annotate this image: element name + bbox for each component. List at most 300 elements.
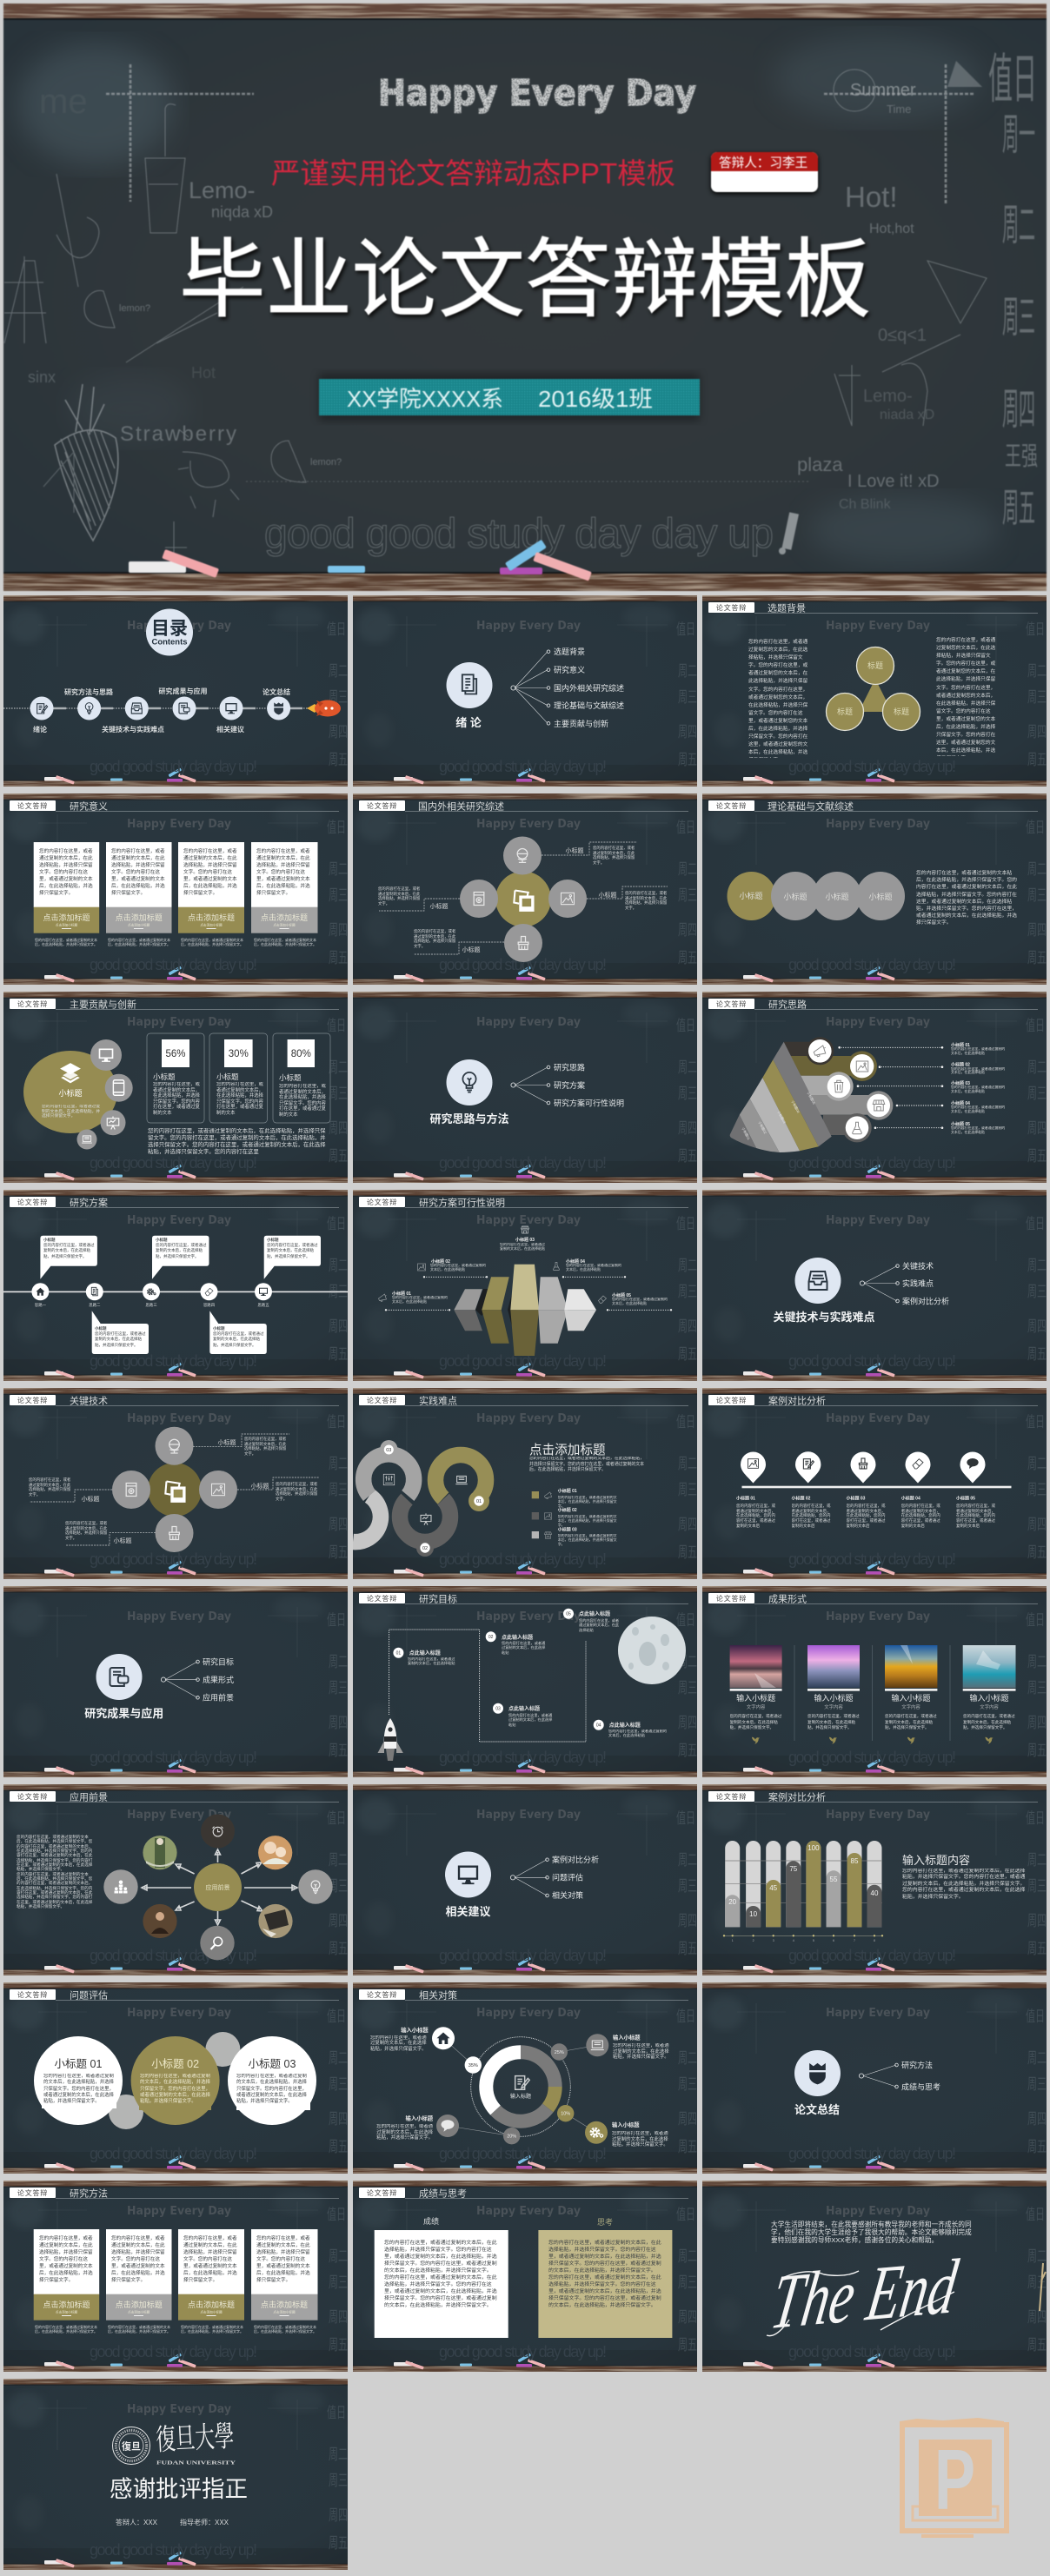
text right: 您的内容打在这里，或者通过复制的文本后，在此选择粘贴，并选择只保留文字。 bbox=[625, 891, 667, 909]
item labels: 小标题 01 bbox=[951, 1042, 970, 1048]
section items: 研究思路 bbox=[554, 1062, 585, 1072]
legend labels: 小标题 02 bbox=[558, 1507, 577, 1513]
column labels: 小标题 03 bbox=[847, 1495, 866, 1502]
item labels: 小标题 03 bbox=[515, 1237, 535, 1243]
slide: 目录: 周三 bbox=[329, 689, 348, 707]
flower diagram bbox=[112, 1427, 237, 1552]
slide: 论文总结 section: 周三 bbox=[1027, 2076, 1047, 2094]
slide: 研究方法: 值日 bbox=[327, 2206, 346, 2224]
heading bbox=[10, 998, 339, 1010]
branch lines bbox=[511, 1066, 550, 1105]
heading: 选题背景 bbox=[768, 601, 806, 614]
axis: 7 bbox=[854, 1939, 855, 1942]
card text 2: 您的内容打在这里，或者通过复制的文本后，在此选择粘贴，并选择只保留文字。您的内容打在这里，或者通过复制的文本后，在此选择粘贴，并选择只保留文字。 bbox=[111, 2236, 165, 2283]
slide: The End: 周五 bbox=[1027, 2337, 1047, 2354]
outer icon circles bbox=[103, 1815, 333, 1960]
number circles bbox=[393, 1609, 604, 1730]
slide: 国内外相关研究综述: 周四 bbox=[678, 922, 697, 939]
card captions: 点击添加小标题 bbox=[200, 923, 223, 926]
section items: 关键技术 bbox=[902, 1261, 934, 1271]
section icon bbox=[794, 1258, 841, 1304]
slide: 实践难点: 周四 bbox=[678, 1517, 697, 1534]
chalk writing right: niada xD bbox=[880, 408, 934, 422]
text 2: 您的内容打在这里，或者通过复制的文本后，在此选择粘贴，并选择只保留文字。 bbox=[807, 1714, 860, 1730]
card panels bbox=[34, 2229, 317, 2320]
ribbon end markers: 02 bbox=[422, 1546, 428, 1551]
cone diagram: 小标题03 bbox=[776, 1110, 787, 1124]
item titles: 点此输入标题 bbox=[579, 1610, 610, 1617]
column labels bbox=[736, 1495, 975, 1502]
picture captions: 文字内容 bbox=[747, 1703, 766, 1710]
card captions: 点击添加标题 bbox=[188, 913, 235, 922]
closing script: The End bbox=[766, 2243, 963, 2346]
legend labels: 小标题 01 bbox=[558, 1488, 577, 1494]
heading bbox=[708, 1790, 1038, 1803]
presenter badge: 答辩人：习李王 bbox=[719, 156, 807, 170]
slide: 案例对比分析 bar chart bbox=[702, 1784, 1047, 1975]
slide: 研究方法: Happy Every Day bbox=[127, 2205, 232, 2218]
slide: The End bbox=[702, 2181, 1047, 2372]
white circle 01 bbox=[34, 2036, 123, 2125]
center circle: 应用前景 bbox=[205, 1883, 229, 1891]
heading: 案例对比分析 bbox=[768, 1790, 826, 1803]
slide: 案例对比分析 bar chart: 周三 bbox=[1027, 1878, 1047, 1895]
heading: 论文答辩 bbox=[17, 1792, 48, 1801]
timeline labels bbox=[33, 687, 290, 734]
slide: 问题评估: 周三 bbox=[329, 2076, 348, 2094]
three circle diagram: 标题 bbox=[867, 661, 883, 670]
slide: 研究目标 bbox=[353, 1586, 697, 1777]
donut center: 输入标题 bbox=[510, 2093, 531, 2100]
slide: 绪论 section bbox=[353, 595, 697, 787]
slide: 案例对比分析 bar chart: 周五 bbox=[1027, 1941, 1047, 1958]
department ribbon: XX学院XXXX系 bbox=[347, 386, 503, 412]
slide: 问题评估 bbox=[3, 1982, 348, 2174]
item text 02: 您的内容打在这里，或者通过复制的文本后，在此选择粘贴 bbox=[502, 1641, 545, 1655]
slide: 目录 bbox=[3, 595, 889, 787]
slide: 相关对策: good good study day day up! bbox=[439, 2145, 607, 2162]
slide: 实践难点 bbox=[353, 1388, 697, 1579]
item labels: 小标题 05 bbox=[612, 1292, 631, 1298]
callout text 3: 小标题 bbox=[267, 1238, 278, 1242]
heading: 研究方案 bbox=[70, 1196, 108, 1208]
slide: 相关对策: 周五 bbox=[678, 2139, 697, 2156]
stat values: 56% bbox=[165, 1049, 186, 1059]
slide: 研究思路: good good study day day up! bbox=[788, 1154, 956, 1172]
item titles: 点此输入标题 bbox=[502, 1634, 533, 1641]
slide: 研究方案: 周四 bbox=[329, 1318, 348, 1336]
slide: 绪论 section: 周四 bbox=[678, 724, 697, 741]
olive circle 02 bbox=[131, 2036, 220, 2125]
three circle diagram: 标题 bbox=[837, 707, 853, 716]
slide: 案例对比分析 timeline: 周二 bbox=[1027, 1455, 1047, 1473]
slide: 研究意义: 周三 bbox=[329, 887, 348, 905]
timeline icons bbox=[37, 702, 283, 714]
slide: 目录: 值日 bbox=[327, 621, 346, 639]
slide: 研究方案可行性说明: 周五 bbox=[678, 1346, 697, 1364]
slide: 研究思路与方法 section: Happy Every Day bbox=[476, 1016, 581, 1029]
slide: 感谢批评指正: 周二 bbox=[329, 2446, 348, 2464]
numbers: 01 bbox=[396, 1651, 401, 1656]
timeline labels: 研究成果与应用 bbox=[158, 687, 207, 695]
heading: 论文答辩 bbox=[716, 1594, 747, 1603]
heading: 问题评估 bbox=[70, 1990, 108, 2001]
chalk writing right: Hot! bbox=[845, 181, 898, 213]
panel text left: 您的内容打在这里，或者通过复制的文本后，在此选择粘贴，并选择只保留文字。您的内容打在这里，或者通过复制的文本后，在此选择粘贴，并选择只保留文字。您的内容打在这里，或者通过复制的文本后，在此选择粘贴，并选择只保留文字。 bbox=[384, 2241, 497, 2274]
item text 03: 您的内容打在这里，或者通过复制的文本后，在此选择粘贴 bbox=[508, 1713, 552, 1727]
slide: 研究思路与方法 section: 周五 bbox=[678, 1148, 697, 1165]
chalk writing right bbox=[797, 50, 1038, 530]
slide: 研究意义: 周五 bbox=[329, 950, 348, 967]
slide: 研究思路与方法 section bbox=[353, 992, 697, 1183]
item labels: 小标题 01 bbox=[392, 1291, 411, 1297]
chalk writing right: Hot,hot bbox=[869, 222, 914, 236]
slide: 研究方案可行性说明: Happy Every Day bbox=[476, 1214, 581, 1227]
section items: 理论基础与文献综述 bbox=[554, 700, 624, 710]
slide: 研究方法 bbox=[3, 2181, 348, 2372]
slide: 研究思路与方法 section: 周三 bbox=[678, 1086, 697, 1103]
value labels: 45 bbox=[769, 1884, 778, 1892]
heading: 论文答辩 bbox=[367, 1990, 397, 1999]
branch lines bbox=[511, 650, 550, 725]
chalk writing left: lemon? bbox=[119, 303, 150, 314]
card text 4: 您的内容打在这里，或者通过复制的文本后，在此选择粘贴，并选择只保留文字。您的内容打在这里，或者通过复制的文本后，在此选择粘贴，并选择只保留文字。 bbox=[256, 2236, 310, 2283]
heading: 主要贡献与创新 bbox=[70, 998, 136, 1010]
paragraph left: 您的内容打在这里，或者通过复制的文本后，在此选择粘贴，并选择只保留文字。您的内容打在这里，或者通过复制的文本后，在此选择粘贴，并选择只保留文字。您的内容打在这里，或者通过复制的文本后，在此选择粘贴，并选择只保留文字。您的内容打在这里，或者通过复制的文本后，在此选择粘贴，并选择只保留文字。 bbox=[17, 1872, 92, 1909]
slide: 研究成果与应用 section: 周三 bbox=[329, 1680, 348, 1697]
callout titles: 输入小标题 bbox=[406, 2114, 434, 2122]
slide: 实践难点: good good study day day up! bbox=[439, 1550, 607, 1568]
section items: 相关对策 bbox=[552, 1890, 583, 1900]
card text 1: 您的内容打在这里，或者通过复制的文本后，在此选择粘贴，并选择只保留文字。您的内容打在这里，或者通过复制的文本后，在此选择粘贴，并选择只保留文字。 bbox=[39, 849, 93, 896]
callout text 5: 小标题 bbox=[213, 1326, 224, 1331]
slide: 研究方法: 周三 bbox=[329, 2274, 348, 2292]
slide: 绪论 section: 周二 bbox=[678, 662, 697, 681]
callout titles: 输入小标题 bbox=[613, 2034, 641, 2041]
value labels: 100 bbox=[807, 1844, 820, 1852]
sub-title labels: 小标题 bbox=[565, 846, 584, 854]
numbers: 03 bbox=[495, 1707, 501, 1712]
slide: 研究成果与应用 section: 周二 bbox=[329, 1653, 348, 1671]
slide: 选题背景 bbox=[702, 595, 1047, 787]
slide: 研究思路: 值日 bbox=[1026, 1017, 1045, 1035]
value labels: 40 bbox=[871, 1889, 879, 1897]
contents badge bbox=[146, 608, 193, 655]
chalk writing right: Ch Blink bbox=[839, 497, 892, 512]
timeline nodes bbox=[30, 697, 290, 720]
cone diagram: 小标题02 bbox=[757, 1120, 768, 1134]
callout text 2: 小标题 bbox=[156, 1238, 167, 1242]
university seal bbox=[113, 2427, 150, 2465]
dashed connectors bbox=[30, 1434, 319, 1545]
callout titles: 输入小标题 bbox=[401, 2026, 429, 2034]
slide: 实践难点: Happy Every Day bbox=[476, 1412, 581, 1425]
node icons bbox=[36, 1287, 268, 1296]
legend labels: 小标题 03 bbox=[558, 1526, 577, 1533]
circle row: 小标题 bbox=[739, 891, 763, 900]
node labels: 思路四 bbox=[203, 1302, 215, 1308]
heading: 国内外相关研究综述 bbox=[418, 800, 504, 812]
slide: 应用前景: 周五 bbox=[329, 1941, 348, 1958]
slide: 实践难点: 周三 bbox=[678, 1482, 697, 1499]
card captions: 点击添加标题 bbox=[188, 2300, 235, 2309]
callout text TL: 您的内容打在这里，或者通过复制的文本后，在此选择粘贴，并选择只保留文字。 bbox=[370, 2035, 427, 2052]
heading bbox=[359, 1592, 688, 1604]
slide: 成果形式: good good study day day up! bbox=[788, 1749, 956, 1766]
value labels: 55 bbox=[830, 1876, 838, 1883]
column heads: 思考 bbox=[597, 2218, 613, 2227]
section items bbox=[902, 1261, 949, 1305]
text top right: 您的内容打在这里，或者通过复制的文本后，在此选择粘贴，并选择只保留文字。 bbox=[593, 846, 635, 864]
branch lines bbox=[510, 1858, 548, 1897]
slide: 成绩与思考: 周二 bbox=[678, 2247, 697, 2266]
text 1: 您的内容打在这里，或者通过复制的文本后，在此选择粘贴，并选择只保留文字。 bbox=[730, 1714, 781, 1730]
slide: 论文总结 section: 值日 bbox=[1026, 2008, 1045, 2026]
slide: 案例对比分析 timeline: 值日 bbox=[1026, 1413, 1045, 1431]
branch lines bbox=[859, 2063, 898, 2088]
dashed connectors bbox=[379, 842, 668, 954]
column text 4: 您的内容打在这里，或者通过复制的文本后，在此选择粘贴，您的内容打在这里，或者通过复制的文本后 bbox=[901, 1504, 940, 1528]
slide: The End: 周四 bbox=[1027, 2309, 1047, 2327]
text 03: 您的内容打在这里，或者通过复制的文本后，在此选择粘贴，并选择只保留文字。您的内容打在这里，或者通过复制的文本后，在此选择粘贴，并选择只保留文字。 bbox=[236, 2074, 307, 2104]
axis: 4 bbox=[793, 1939, 794, 1942]
numbers: 05 bbox=[566, 1611, 571, 1617]
section items: 国内外相关研究综述 bbox=[554, 683, 624, 693]
slide: 研究思路与方法 section: 周四 bbox=[678, 1120, 697, 1138]
slide: 论文总结 section: good good study day day up! bbox=[788, 2145, 956, 2162]
item labels: 小标题 03 bbox=[951, 1080, 970, 1086]
slide: 研究方案可行性说明: 周三 bbox=[678, 1284, 697, 1301]
slide: 主要贡献与创新: 周三 bbox=[329, 1086, 348, 1103]
chalk writing right: 0≤q<1 bbox=[878, 326, 927, 345]
slide: 研究方案可行性说明 bbox=[353, 1190, 697, 1381]
column labels: 小标题 02 bbox=[791, 1495, 811, 1502]
percent badges: 10% bbox=[561, 2112, 570, 2117]
timeline axis bbox=[3, 707, 308, 709]
heading bbox=[708, 1593, 1038, 1604]
contents badge: Contents bbox=[151, 638, 188, 647]
card captions: 点击添加标题 bbox=[43, 2300, 90, 2309]
chalk writing right: plaza bbox=[797, 454, 843, 475]
paragraph: 您的内容打在这里，或者通过复制的文本粘后，在此选择粘贴，并选择只保留文字。您的内容打在这里，或者通过复制的文本后，在此选择粘贴，并选择只保留文字。您的内容打在这里，或者通过复制的文本后，在此选择粘贴，并选择只保留文字。您的内容打在这里，或者通过复制的文本后，在此选择粘贴，并选择只保留文字。 bbox=[916, 871, 1017, 926]
panel text right bbox=[548, 2240, 661, 2308]
slide: 研究方案 bbox=[3, 1190, 348, 1381]
percent badges bbox=[465, 2043, 574, 2144]
item labels: 小标题 04 bbox=[951, 1100, 970, 1106]
slide: 关键技术: 周四 bbox=[329, 1517, 348, 1534]
slide: 研究成果与应用 section: 值日 bbox=[327, 1611, 346, 1630]
paragraph left bbox=[17, 1835, 92, 1909]
slide: 研究意义 bbox=[3, 793, 348, 985]
timeline labels: 研究方法与思路 bbox=[64, 687, 113, 696]
olive bubble cluster: 小标题 bbox=[58, 1088, 83, 1098]
heading bbox=[10, 2187, 339, 2199]
heading: 论文答辩 bbox=[367, 801, 397, 810]
slide: 研究思路: 周三 bbox=[1027, 1086, 1047, 1103]
sub-title labels: 小标题 bbox=[429, 902, 449, 910]
edge sketch bbox=[1040, 2263, 1046, 2311]
timeline bar bbox=[742, 1486, 1012, 1488]
node labels: 思路五 bbox=[257, 1302, 269, 1308]
card captions: 点击添加小标题 bbox=[128, 923, 150, 926]
caption 1: 您的内容打在这里，或者通过复制的文本后，在此选择粘贴，并选择只保留文字。 bbox=[35, 2325, 97, 2334]
text heading: 点击添加标题 bbox=[529, 1443, 606, 1457]
cone diagram: 小标题04 bbox=[790, 1099, 801, 1113]
section icon bbox=[96, 1654, 143, 1700]
slide: 相关对策: 值日 bbox=[676, 2008, 695, 2026]
slide: 案例对比分析 timeline: Happy Every Day bbox=[826, 1412, 931, 1425]
slide: 研究思路: 周五 bbox=[1027, 1148, 1047, 1165]
column text 1: 您的内容打在这里，或者通过复制的文本后，在此选择粘贴，您的内容打在这里，或者通过复制的文本后 bbox=[736, 1504, 775, 1528]
slide: 研究成果与应用 section: Happy Every Day bbox=[127, 1610, 232, 1623]
panel text left: 您的内容打在这里，或者通过复制的文本后，在此选择粘贴，并选择只保留文字。您的内容打在这里，或者通过复制的文本后，在此选择粘贴，并选择只保留文字。您的内容打在这里，或者通过复制的文本后，在此选择粘贴，并选择只保留文字。 bbox=[384, 2275, 497, 2308]
callout text 5: 您的内容打在这里，或者通过复制的文本后，在此选择粘贴，并选择只保留文字。 bbox=[213, 1331, 264, 1347]
slide: 研究方法: 周四 bbox=[329, 2309, 348, 2327]
chalk line: good good study: good good study day day up bbox=[264, 511, 774, 557]
slide: The End: 值日 bbox=[1026, 2206, 1045, 2224]
card captions: 点击添加小标题 bbox=[273, 2310, 296, 2314]
circle row: 小标题 bbox=[825, 892, 849, 901]
slide: 研究目标: Happy Every Day bbox=[476, 1610, 581, 1623]
section items bbox=[554, 1062, 624, 1107]
item icons bbox=[379, 1226, 607, 1304]
text left: 您的内容打在这里，或者通过复制的文本后，在此选择粘贴，并选择只保留文字。 bbox=[29, 1477, 70, 1497]
percent badges: 20% bbox=[507, 2134, 516, 2140]
chalk doodles right bbox=[824, 61, 987, 426]
icon: rocket bbox=[307, 700, 341, 716]
timeline labels: 绪论 bbox=[33, 725, 47, 734]
slide: 研究成果与应用 section: 周五 bbox=[329, 1743, 348, 1760]
section items: 成绩与思考 bbox=[901, 2082, 940, 2091]
chalk writing left bbox=[28, 83, 342, 468]
flourish strokes bbox=[767, 2271, 954, 2336]
picture captions: 文字内容 bbox=[901, 1703, 920, 1710]
heading: 研究思路 bbox=[768, 998, 807, 1010]
blackboard background bbox=[3, 3, 1047, 591]
pin icons bbox=[748, 1458, 979, 1469]
chalk writing left: lemon? bbox=[310, 457, 342, 468]
heading bbox=[359, 2188, 688, 2199]
heading: 论文答辩 bbox=[17, 2188, 48, 2197]
ribbon end markers bbox=[380, 1440, 489, 1557]
dividers bbox=[794, 1645, 950, 1741]
heading: 研究目标 bbox=[419, 1592, 457, 1604]
callouts bbox=[40, 1236, 321, 1354]
slide: 研究意义: Happy Every Day bbox=[127, 818, 232, 831]
section items: 选题背景 bbox=[554, 647, 585, 656]
picture captions: 输入小标题 bbox=[969, 1693, 1009, 1703]
section items: 研究目标 bbox=[203, 1656, 234, 1667]
card captions: 点击添加标题 bbox=[43, 913, 90, 922]
text left: 您的内容打在这里，或者通过复制的文本后，在此选择粘贴，并选择只保留文字。 bbox=[378, 886, 420, 906]
slide: 成果形式: 周三 bbox=[1027, 1680, 1047, 1697]
slide: 理论基础与文献综述: good good study day day up! bbox=[788, 956, 956, 973]
slide: 选题背景: Happy Every Day bbox=[826, 620, 931, 633]
value labels: 75 bbox=[789, 1865, 798, 1873]
section items: 成果形式 bbox=[203, 1675, 234, 1684]
axis: 3 bbox=[773, 1939, 774, 1942]
card captions: 点击添加标题 bbox=[116, 2300, 163, 2309]
section title: 关键技术与实践难点 bbox=[773, 1311, 875, 1324]
photo circles bbox=[143, 1836, 293, 1938]
slide: 相关建议 section: 周二 bbox=[678, 1851, 697, 1869]
card captions: 点击添加标题 bbox=[261, 913, 308, 922]
heading: 论文答辩 bbox=[716, 999, 747, 1008]
picture captions: 输入小标题 bbox=[736, 1693, 775, 1703]
slide: 相关建议 section: 周四 bbox=[678, 1913, 697, 1930]
heading: Happy Every Day: Happy Every Day bbox=[378, 72, 696, 114]
slide: 国内外相关研究综述: 周五 bbox=[678, 950, 697, 967]
card panels bbox=[34, 842, 317, 933]
slide: 选题背景: 周四 bbox=[1027, 724, 1047, 741]
callout text 1: 您的内容打在这里，或者通过复制的文本后，在此选择粘贴，并选择只保留文字。 bbox=[43, 1243, 94, 1258]
slide: 关键技术与实践难点 section: 周五 bbox=[1027, 1346, 1047, 1364]
watermark stamp bbox=[900, 2418, 1009, 2538]
text 01: 您的内容打在这里，或者通过复制的文本后，在此选择粘贴，并选择只保留文字。您的内容打在这里，或者通过复制的文本后，在此选择粘贴，并选择只保留文字。 bbox=[43, 2074, 114, 2104]
heading: 论文答辩 bbox=[367, 2188, 397, 2197]
slide: 理论基础与文献综述: Happy Every Day bbox=[826, 818, 931, 831]
donut chart bbox=[472, 2038, 569, 2135]
panel text right: 您的内容打在这里，或者通过复制的文本后，在此选择粘贴，并选择只保留文字。您的内容打在这里，或者通过复制的文本后，在此选择粘贴，并选择只保留文字。您的内容打在这里，或者通过复制的文本后，在此选择粘贴，并选择只保留文字。 bbox=[548, 2241, 661, 2274]
bubble text: 您的内容打在这里，或者通过复制的文本后，在此选择粘贴，并选择只保留文字。 bbox=[42, 1105, 100, 1119]
column labels: 小标题 05 bbox=[956, 1495, 975, 1502]
slide: 研究目标: 周三 bbox=[678, 1680, 697, 1697]
column text 3: 您的内容打在这里，或者通过复制的文本后，在此选择粘贴，您的内容打在这里，或者通过复制的文本后 bbox=[847, 1504, 885, 1528]
slide: 成果形式: 周四 bbox=[1027, 1715, 1047, 1732]
slide: 研究思路与方法 section: 值日 bbox=[676, 1017, 695, 1035]
dotted leaders bbox=[840, 1047, 942, 1128]
olive bubble cluster bbox=[23, 1039, 133, 1149]
heading bbox=[10, 1790, 339, 1803]
axis: 2 bbox=[753, 1939, 754, 1942]
slide: 应用前景 bbox=[3, 1784, 348, 1975]
heading: 应用前景 bbox=[70, 1790, 108, 1803]
slide: 成绩与思考: 周四 bbox=[678, 2309, 697, 2327]
slide: 案例对比分析 bar chart: 周四 bbox=[1027, 1913, 1047, 1930]
card text 1: 您的内容打在这里，或者通过复制的文本后，在此选择粘贴，并选择只保留文字。您的内容打在这里，或者通过复制的文本后，在此选择粘贴，并选择只保留文字。 bbox=[39, 2236, 93, 2283]
section items bbox=[554, 647, 624, 728]
section items bbox=[203, 1656, 234, 1702]
slide: 主要贡献与创新: 周五 bbox=[329, 1148, 348, 1165]
slide: 成果形式: Happy Every Day bbox=[826, 1610, 931, 1623]
text bottom: 您的内容打在这里，或者通过复制的文本后，在此选择粘贴，并选择只保留文字。 bbox=[65, 1521, 107, 1540]
slide: 相关建议 section: 值日 bbox=[676, 1809, 695, 1828]
item labels: 小标题 02 bbox=[951, 1062, 970, 1067]
slide: 研究目标: 值日 bbox=[676, 1611, 695, 1630]
heading: 论文答辩 bbox=[716, 1792, 747, 1801]
heading: 论文答辩 bbox=[17, 801, 48, 810]
slide: 论文总结 section bbox=[702, 1982, 1047, 2174]
text right: 您的内容打在这里，或者通过复制的文本后，在此选择粘贴，并选择只保留文字。 bbox=[276, 1482, 317, 1500]
slide: 理论基础与文献综述: 周五 bbox=[1027, 950, 1047, 967]
sub-title labels bbox=[82, 1438, 269, 1544]
slide: 关键技术与实践难点 section: Happy Every Day bbox=[826, 1214, 931, 1227]
slide: 成绩与思考: good good study day day up! bbox=[439, 2343, 607, 2360]
section title: 论文总结 bbox=[794, 2103, 840, 2116]
slide: 相关对策 bbox=[353, 1982, 697, 2174]
node labels bbox=[35, 1302, 269, 1308]
sub-title labels: 小标题 bbox=[598, 891, 617, 899]
callout text 4: 小标题 bbox=[95, 1326, 106, 1331]
slide: 论文总结 section: 周五 bbox=[1027, 2139, 1047, 2156]
department ribbon bbox=[319, 374, 700, 421]
timeline line bbox=[3, 1291, 348, 1292]
slide: 关键技术与实践难点 section: good good study day day up! bbox=[788, 1352, 956, 1370]
heading bbox=[359, 1394, 688, 1406]
slide: 感谢批评指正: Happy Every Day bbox=[127, 2403, 232, 2416]
picture captions: 输入小标题 bbox=[814, 1693, 854, 1703]
text 3: 您的内容打在这里，或者通过复制的文本后，在此选择粘贴，并选择只保留文字。 bbox=[885, 1714, 937, 1730]
